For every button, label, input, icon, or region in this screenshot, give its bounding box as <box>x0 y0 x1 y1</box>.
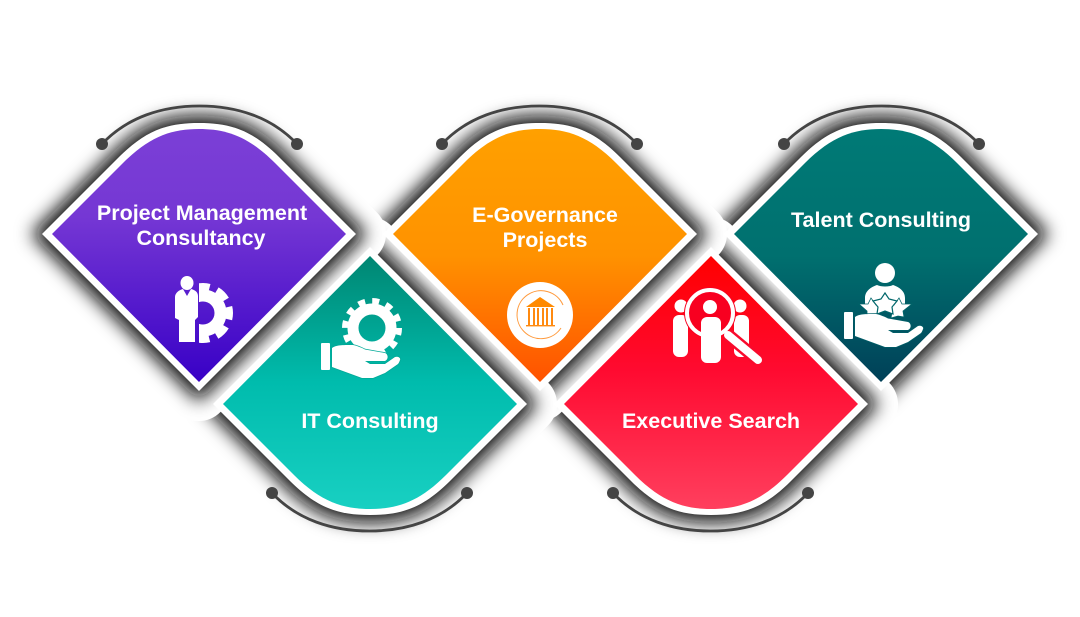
heading: project management consultancy: Project Management <box>97 201 307 225</box>
shadow: e-governance <box>383 123 697 391</box>
heading: executive search: Executive Search <box>622 409 800 433</box>
shadow: executive search <box>554 247 868 515</box>
icon: hand holding person and stars <box>844 263 923 347</box>
heading: project management consultancy: Consultancy <box>136 226 266 250</box>
icon: magnifier over people <box>673 287 758 363</box>
arc: executive search <box>607 487 814 531</box>
panel: talent consulting <box>724 123 1038 391</box>
shadow: talent consulting <box>724 123 1038 391</box>
icon: businessman with gear <box>175 276 230 342</box>
shadow: it consulting <box>213 247 527 515</box>
shadow: project management <box>42 123 356 391</box>
arc: it consulting <box>266 487 473 531</box>
heading: project management consultancy <box>97 201 307 250</box>
panel: it consulting <box>213 247 527 515</box>
icon: bank in circle <box>507 282 573 348</box>
heading: e-governance projects: E-Governance <box>472 203 618 227</box>
panel: e-governance projects <box>383 123 697 391</box>
panel: executive search <box>554 247 868 515</box>
arc: e-governance <box>436 106 643 150</box>
icon: hand holding gear <box>321 301 400 378</box>
heading: it consulting: IT Consulting <box>301 409 439 433</box>
arc: project management <box>96 106 303 150</box>
heading: talent consulting: Talent Consulting <box>791 208 971 232</box>
panel: project management consultancy <box>42 123 356 391</box>
heading: e-governance projects: Projects <box>503 228 587 252</box>
arc: talent consulting <box>778 106 985 150</box>
heading: e-governance projects <box>472 203 618 252</box>
